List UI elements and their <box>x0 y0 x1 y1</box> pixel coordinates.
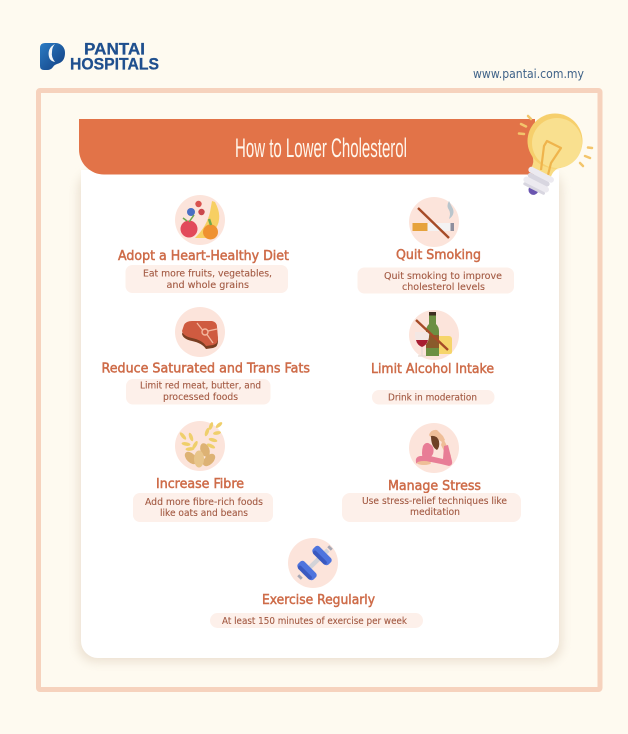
description pill: processed foods <box>163 392 238 403</box>
item: Quit Smoking <box>358 197 514 294</box>
icon: dumbbell <box>288 538 338 588</box>
logo text: HOSPITALS <box>70 56 159 74</box>
website url: www.pantai.com.my <box>473 67 584 81</box>
item: Exercise Regularly <box>210 538 423 628</box>
heading: Reduce Saturated and Trans Fats <box>102 362 310 377</box>
description pill: Add more fibre-rich foods <box>145 497 263 508</box>
icon: no smoking <box>409 197 459 247</box>
icon: logo mark <box>40 43 65 70</box>
item: Manage Stress <box>342 423 521 522</box>
icon: steak <box>175 307 225 357</box>
item: Adopt a Heart-Healthy Diet <box>118 195 289 293</box>
heading: Adopt a Heart-Healthy Diet <box>118 249 289 264</box>
description pill <box>358 268 514 294</box>
heading: Manage Stress <box>388 479 481 494</box>
description pill <box>210 613 423 628</box>
panel: outer frame <box>38 90 600 690</box>
description pill: Limit red meat, butter, and <box>140 381 261 392</box>
heading: Quit Smoking <box>396 248 481 263</box>
description pill: meditation <box>410 507 460 518</box>
description pill: Eat more fruits, vegetables, <box>143 268 272 280</box>
description pill <box>342 493 521 522</box>
panel: white card <box>78 170 562 662</box>
item: Reduce Saturated and Trans Fats <box>102 307 310 404</box>
description pill: Drink in moderation <box>388 393 477 404</box>
icon: grains and beans <box>175 421 225 471</box>
heading: Exercise Regularly <box>262 593 375 608</box>
item: Limit Alcohol Intake <box>371 310 494 404</box>
description pill: like oats and beans <box>160 508 248 519</box>
icon: fruits <box>175 195 225 245</box>
icon: light bulb <box>519 114 592 201</box>
header banner <box>79 119 535 174</box>
description pill: cholesterol levels <box>402 282 485 293</box>
description pill <box>126 379 270 404</box>
heading: Increase Fibre <box>156 477 244 492</box>
logo text: PANTAI <box>84 40 145 58</box>
description pill <box>133 493 273 522</box>
logo text <box>70 40 159 74</box>
description pill: Use stress-relief techniques like <box>362 496 507 507</box>
heading: Limit Alcohol Intake <box>371 362 494 377</box>
description pill: and whole grains <box>166 280 249 291</box>
item: Increase Fibre <box>133 421 273 522</box>
icon: no alcohol <box>409 310 459 360</box>
description pill: At least 150 minutes of exercise per week <box>222 616 407 627</box>
title: How to Lower Cholesterol <box>235 133 407 163</box>
description pill <box>126 265 288 293</box>
icon: yoga pose <box>409 423 459 473</box>
logo: Pantai Hospitals <box>40 40 159 74</box>
description pill: Quit smoking to improve <box>384 271 502 282</box>
